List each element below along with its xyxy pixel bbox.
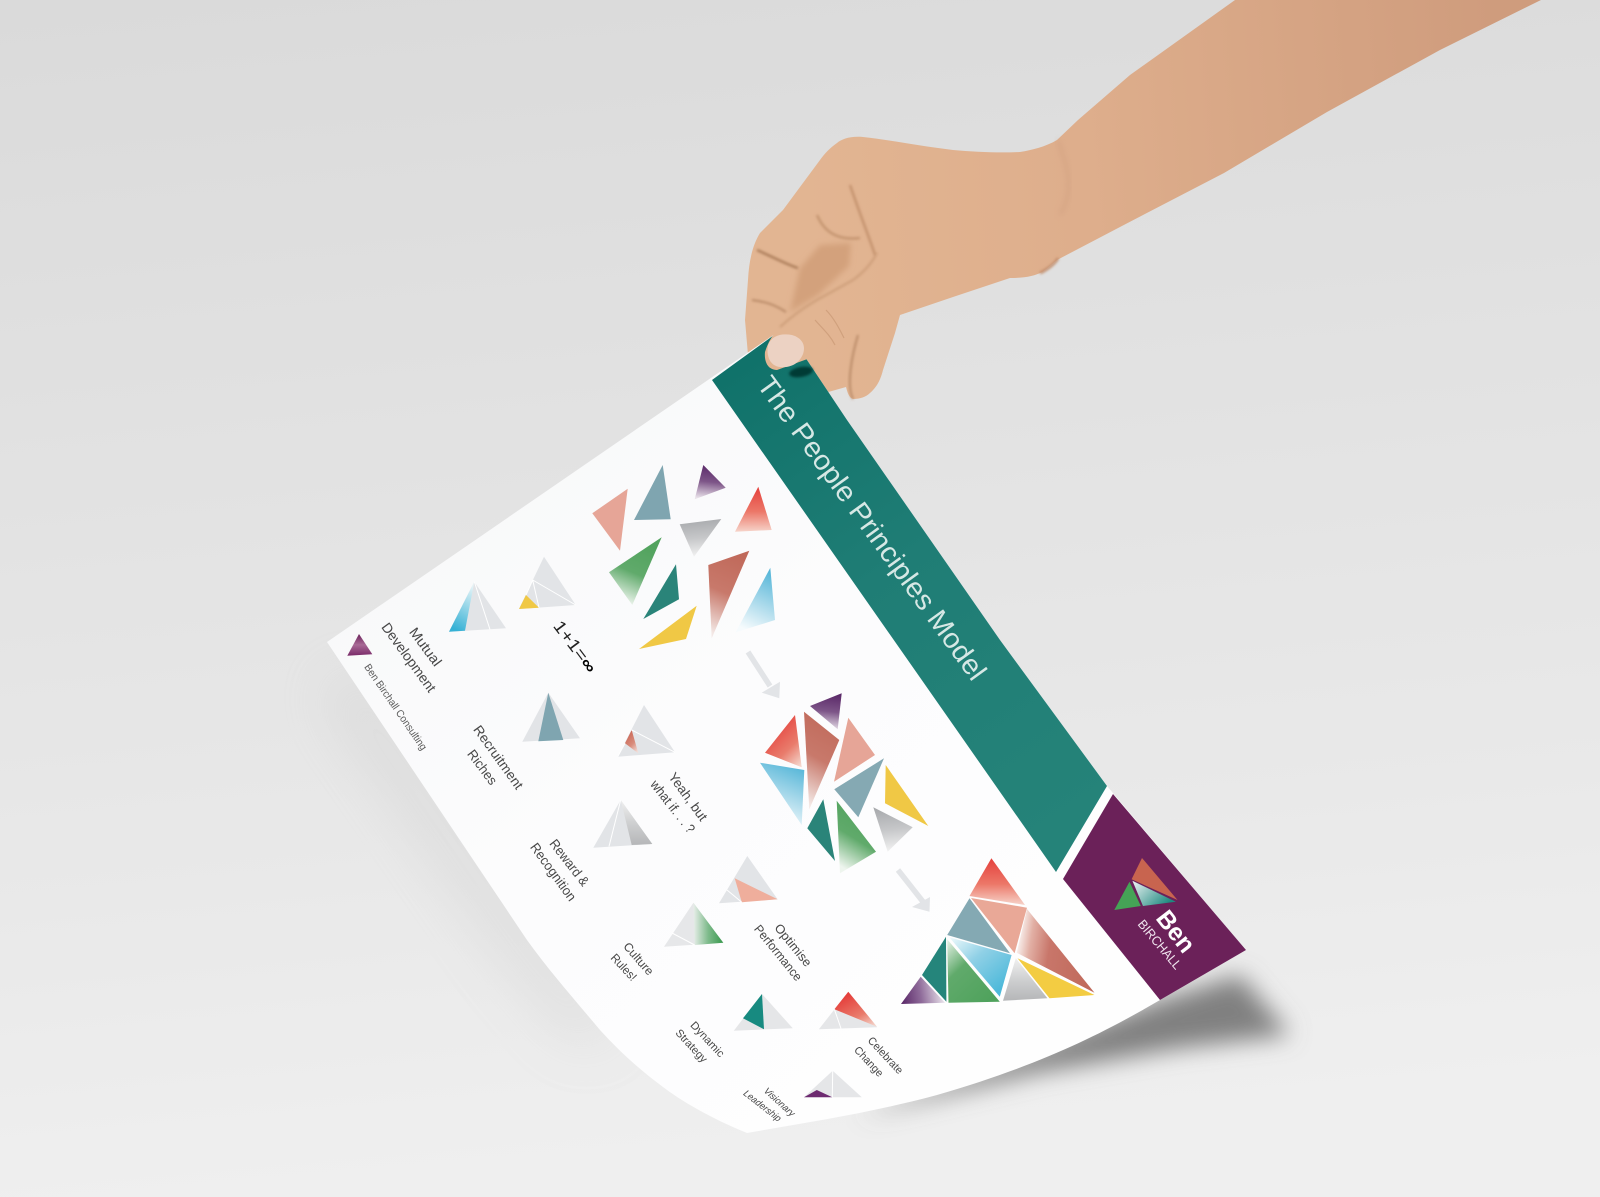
text: optimise performance: Optimise (772, 921, 815, 970)
text: reward and recognition: Recognition (527, 840, 579, 904)
text: yeah but what if: Yeah, but (665, 770, 711, 824)
icon: thumbnail (768, 334, 804, 367)
text: celebrate change: Change (851, 1044, 885, 1080)
soft shadow under paper left edge (340, 680, 600, 1035)
icon: mutual development (449, 582, 506, 632)
icon: culture rules (664, 903, 723, 947)
icon: optimise performance (719, 856, 778, 903)
assembled large triangle (901, 858, 1094, 1004)
text: 1+1=infinity: 1+1=∞ (549, 617, 601, 676)
logo wordmark: Birchall: BIRCHALL (1135, 917, 1185, 972)
text: mutual development: Development (378, 619, 440, 695)
logo wordmark: Ben: Ben (1150, 905, 1201, 958)
text: culture rules: Rules! (608, 951, 640, 984)
icon: footer logo (347, 634, 372, 656)
paper sheet (327, 327, 1246, 1133)
text: culture rules: Culture (620, 939, 657, 978)
logo mark (1114, 858, 1178, 910)
text: visionary leadership: Leadership (740, 1089, 784, 1124)
text: reward and recognition: Reward & (546, 836, 592, 889)
text: optimise performance: Performance (751, 922, 805, 984)
icon: recruitment riches (522, 693, 580, 742)
text: visionary leadership: Visionary (760, 1087, 798, 1119)
title: The People Principles Model (751, 370, 993, 686)
logo panel (1063, 794, 1246, 1000)
text: recruitment riches: Riches (464, 747, 500, 788)
hand: thumb over paper (765, 253, 905, 370)
text: celebrate change: Celebrate (865, 1035, 905, 1077)
icon: 1+1 (519, 557, 576, 609)
finger shading (790, 243, 851, 312)
thumb knuckle lines (815, 310, 844, 345)
shadow cast by paper (860, 975, 1290, 1116)
text: dynamic strategy (673, 1020, 727, 1066)
arrow: grouped to assembled (898, 870, 930, 912)
icon: celebrate change (819, 992, 877, 1029)
hand: fingers behind paper and arm (745, 0, 1541, 400)
text: yeah but what if: what if. . . ? (647, 777, 698, 836)
scattered triangles (592, 465, 775, 649)
thumb shadow on band (788, 365, 814, 379)
arrow: scattered to grouped (748, 652, 780, 698)
text: recruitment riches: Recruitment (470, 722, 526, 792)
text: dynamic strategy: Strategy (673, 1027, 710, 1066)
icon: visionary leadership (804, 1071, 862, 1097)
icon: dynamic strategy (734, 994, 793, 1031)
text: company name: Ben Birchall Consulting (361, 662, 429, 753)
text: mutual development: Mutual (406, 624, 445, 669)
thumb upper crease (780, 253, 877, 327)
text: culture rules (608, 939, 657, 984)
text: dynamic strategy: Dynamic (688, 1020, 727, 1060)
icon: yeah but what if (618, 705, 675, 757)
grouped triangles (760, 693, 928, 873)
icon: reward and recognition (593, 800, 652, 848)
title band (712, 327, 1107, 872)
